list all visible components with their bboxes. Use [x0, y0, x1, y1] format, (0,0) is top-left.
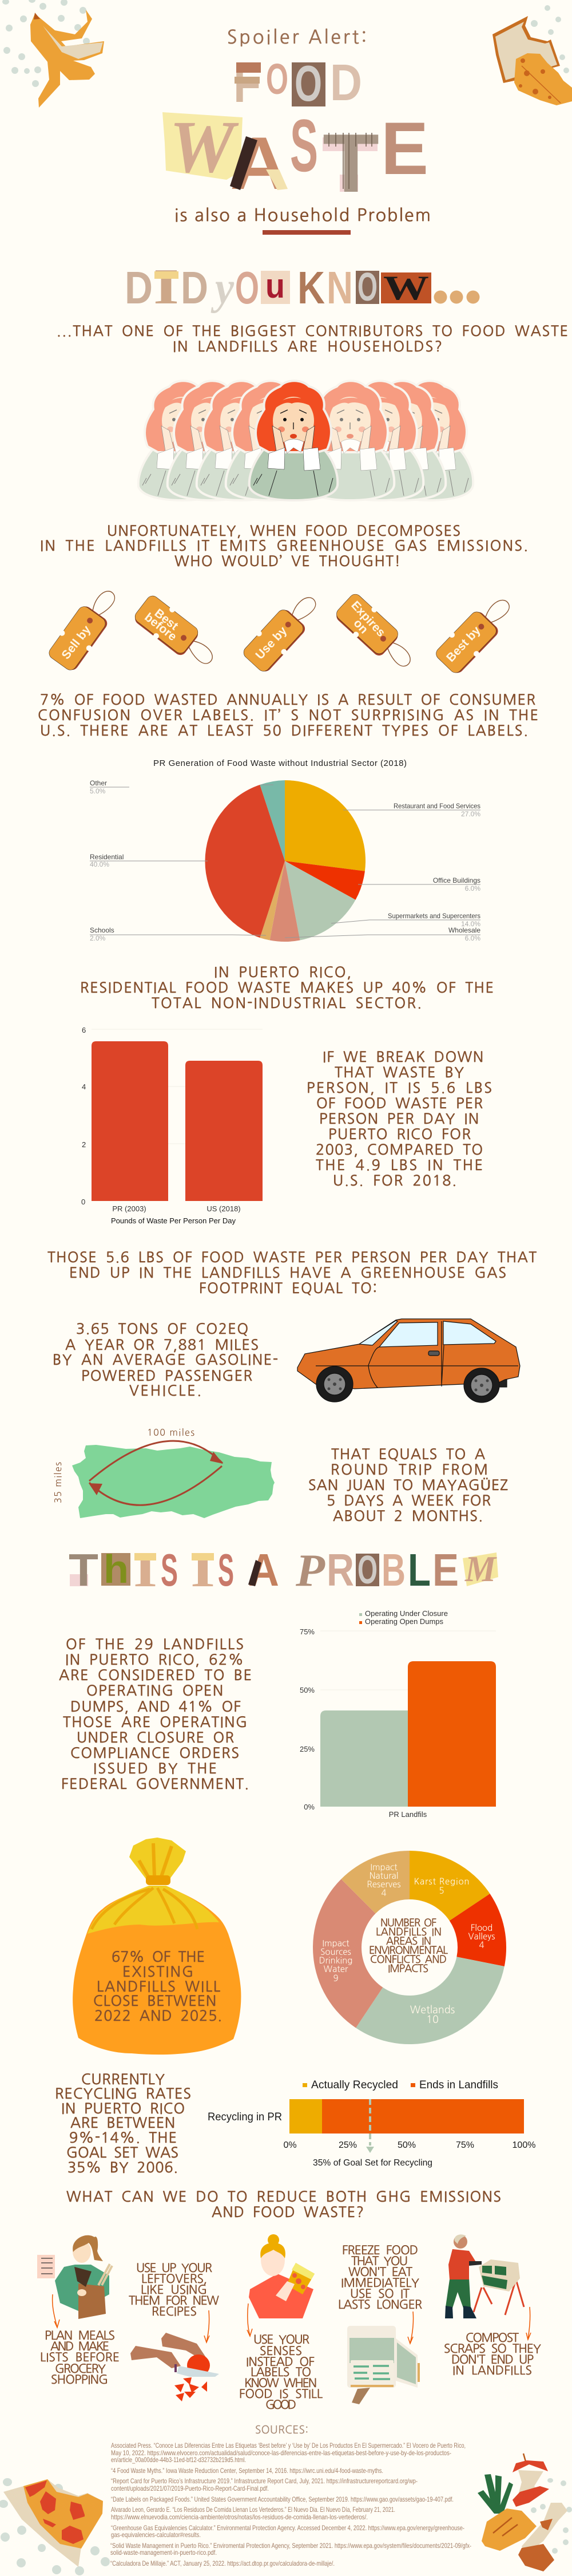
- decoration: bottom-left pizza and dots: [0, 2478, 110, 2575]
- heading: Did you know collage letters: [125, 259, 479, 315]
- icon: garbage bag with text: [73, 1838, 241, 2055]
- text: freeze food: WON'T EAT: [348, 2266, 413, 2278]
- heading: this is a problem collage letters: M: [464, 1548, 497, 1589]
- text: landfills open dumps: IN PUERTO RICO, 62%: [65, 1653, 244, 1667]
- heading: what can we do: [66, 2190, 501, 2219]
- text: source list: “Report Card for Puerto Rico’s Infrastructure 2019.” Infrastructure Report Card, July, 2021. https://infrastructurereportcard.org/wp-: [111, 2477, 418, 2485]
- text: freeze food: FREEZE FOOD: [342, 2245, 418, 2257]
- text: tons of CO2: 3.65 TONS OF CO2EQ: [76, 1322, 248, 1336]
- icon: garbage bag with text: CLOSE BETWEEN: [93, 1994, 216, 2008]
- icon: food date tags: before: [142, 611, 179, 643]
- text: compost: COMPOST: [466, 2332, 519, 2344]
- bar chart: pounds of waste per person: 4: [82, 1082, 86, 1091]
- text: waste per person: [307, 1050, 492, 1188]
- pie chart: PR generation of food waste: 6.0%: [465, 884, 480, 892]
- text: landfills open dumps: OPERATING OPEN: [86, 1684, 223, 1698]
- title: FOOD collage letters: O: [266, 55, 288, 103]
- text: source list: content/uploads/2021/07/2019-Puerto-Rico-Report-Card-Final.pdf.: [111, 2484, 269, 2492]
- subtitle: is also a Household Problem: [174, 207, 431, 224]
- title: FOOD collage letters: F: [233, 53, 261, 114]
- donut chart: landfills in conflict areas: Sources: [320, 1948, 351, 1957]
- heading: Did you know collage letters: K: [297, 262, 325, 313]
- donut chart: landfills in conflict areas: 4: [479, 1941, 484, 1950]
- bar chart: PR landfills: 50%: [300, 1686, 315, 1694]
- donut chart: landfills in conflict areas: 10: [426, 2014, 439, 2025]
- text: tons of CO2: BY AN AVERAGE GASOLINE-: [53, 1353, 278, 1367]
- bar chart: PR landfills: Operating Under Closure: [365, 1609, 448, 1618]
- bar chart: recycling in PR: 35% of Goal Set for Recycling: [313, 2158, 432, 2168]
- donut chart: landfills in conflict areas: Impact: [370, 1863, 398, 1872]
- pie chart: PR generation of food waste: 40.0%: [90, 860, 109, 868]
- text: landfills open dumps: ARE CONSIDERED TO BE: [59, 1668, 252, 1682]
- icon: food date tags: on: [351, 617, 371, 637]
- arrow: compost: [526, 2307, 531, 2340]
- text: waste per person: THAT WASTE BY: [335, 1065, 464, 1080]
- text: landfills open dumps: COMPLIANCE ORDERS: [70, 1746, 239, 1760]
- bar chart: pounds of waste per person: 2: [82, 1140, 86, 1149]
- text: consumer confusion over labels: U.S. THERE ARE AT LEAST 50 DIFFERENT TYPES OF LABELS.: [40, 724, 528, 738]
- text: greenhouse gas footprint: THOSE 5.6 LBS OF FOOD WASTE PER PERSON PER DAY THAT: [47, 1250, 537, 1265]
- heading: Did you know collage letters: y: [210, 263, 234, 314]
- pie chart: PR generation of food waste: 27.0%: [461, 810, 480, 818]
- heading: sources: SOURCES:: [255, 2424, 308, 2435]
- text: source list: Associated Press. “Conoce Las Diferencias Entre Las Etiquetas ‘Best before’ y ‘Use by’ De Los Productos En El Supermercado.” El Vocero de Puerto Rico,: [111, 2441, 466, 2449]
- pie chart: PR generation of food waste: 5.0%: [90, 787, 106, 795]
- text: compost: [444, 2332, 541, 2377]
- heading: this is a problem collage letters: [69, 1542, 498, 1598]
- text: unfortunately: UNFORTUNATELY, WHEN FOOD DECOMPOSES: [107, 524, 460, 538]
- text: source list: “Greenhouse Gas Equivalencies Calculator.” Environmental Protection Agency. Accessed December 4, 2022. https://www.epa.gov/energy/greenhouse-: [111, 2524, 464, 2532]
- text: source list: “4 Food Waste Myths.” Iowa Waste Reduction Center, September 14, 2016. https://iwrc.uni.edu/4-food-waste-myths.: [111, 2467, 383, 2475]
- bar chart: recycling in PR: Actually Recycled: [311, 2079, 398, 2091]
- heading: this is a problem collage letters: S: [161, 1544, 178, 1595]
- text: plan meals: PLAN MEALS: [45, 2330, 115, 2342]
- pie chart: PR generation of food waste: Office Buildings: [433, 876, 480, 884]
- text: round trip: ABOUT 2 MONTHS.: [333, 1509, 483, 1523]
- heading: Did you know collage letters: N: [327, 262, 353, 313]
- tip: use your senses: [249, 2234, 315, 2318]
- text: use your senses: LABELS TO: [251, 2366, 311, 2379]
- bar chart: recycling in PR: 50%: [398, 2140, 416, 2150]
- bar chart: pounds of waste per person: US (2018): [206, 1204, 241, 1213]
- tip: plan meals: [37, 2235, 112, 2319]
- arrow: freeze food: [408, 2312, 414, 2344]
- pie chart: PR generation of food waste: 14.0%: [461, 920, 480, 928]
- bar chart: PR landfills: 75%: [300, 1627, 315, 1636]
- bar chart: recycling in PR: Recycling in PR: [208, 2111, 282, 2123]
- text: tons of CO2: [53, 1322, 278, 1398]
- text: greenhouse gas footprint: END UP IN THE LANDFILLS HAVE A GREENHOUSE GAS: [69, 1266, 506, 1280]
- text: consumer confusion over labels: [38, 693, 538, 738]
- text: freeze food: USE SO IT: [350, 2288, 410, 2300]
- pie chart: PR generation of food waste: 6.0%: [465, 934, 480, 942]
- text: freeze food: LASTS LONGER: [338, 2299, 422, 2311]
- text: landfills open dumps: [59, 1637, 252, 1791]
- bar chart: recycling in PR: 100%: [513, 2140, 535, 2150]
- text: compost: DON'T END UP: [451, 2354, 534, 2366]
- icon: food date tags: Use by: [253, 624, 289, 662]
- text: waste per person: THE 4.9 LBS IN THE: [316, 1158, 483, 1172]
- icon: food date tags: [45, 581, 519, 677]
- heading: Did you know collage letters: O: [357, 264, 378, 309]
- bar chart: recycling in PR: 75%: [456, 2140, 474, 2150]
- text: leftovers: USE UP YOUR: [136, 2262, 212, 2274]
- title: FOOD collage letters: D: [330, 54, 362, 112]
- text: waste per person: PUERTO RICO FOR: [328, 1127, 471, 1141]
- map: Puerto Rico with round-trip arrows: [54, 1428, 275, 1518]
- donut chart: landfills in conflict areas: Drinking: [319, 1957, 352, 1965]
- text: plan meals: GROCERY: [55, 2363, 106, 2375]
- heading: this is a problem collage letters: L: [408, 1544, 431, 1595]
- text: landfills open dumps: FEDERAL GOVERNMENT.: [61, 1777, 249, 1791]
- donut chart: landfills in conflict areas: IMPACTS: [388, 1963, 428, 1974]
- text: waste per person: U.S. FOR 2018.: [333, 1174, 456, 1188]
- text: waste per person: PERSON PER DAY IN: [319, 1112, 479, 1126]
- text: landfills open dumps: THOSE ARE OPERATING: [63, 1715, 247, 1729]
- text: compost: SCRAPS SO THEY: [444, 2343, 541, 2355]
- heading: this is a problem collage letters: T: [69, 1544, 98, 1595]
- text: waste per person: OF FOOD WASTE PER: [316, 1096, 483, 1111]
- title: FOOD collage letters: [233, 53, 362, 114]
- donut chart: landfills in conflict areas: Natural: [370, 1872, 398, 1880]
- title: WASTE collage letters: E: [381, 106, 428, 190]
- heading: Did you know collage letters: O: [235, 262, 259, 313]
- bar chart: PR landfills: Operating Open Dumps: [365, 1617, 443, 1626]
- text: biggest contributors: [57, 324, 568, 354]
- text: source list: Alvarado Leon, Gerardo E. “Los Residuos De Comida Llenan Los Vertederos.” El Nuevo Dia. El Nuevo Día, February 21, 2021.: [111, 2506, 395, 2514]
- text: source list: gas-equivalencies-calculator#results.: [111, 2531, 201, 2539]
- text: compost: IN LANDFILLS: [452, 2365, 532, 2377]
- map: Puerto Rico with round-trip arrows: 100 miles: [147, 1428, 194, 1437]
- donut chart: landfills in conflict areas: CONFLICTS AND: [370, 1954, 447, 1965]
- decoration: top-left banana peel and dots: [2, 0, 104, 108]
- donut chart: landfills in conflict areas: AREAS IN: [386, 1936, 431, 1946]
- text: recycling rates: IN PUERTO RICO: [61, 2101, 185, 2116]
- text: waste per person: PERSON, IT IS 5.6 LBS: [307, 1081, 492, 1095]
- text: use your senses: KNOW WHEN: [244, 2377, 317, 2389]
- bar chart: PR landfills: [300, 1609, 496, 1819]
- heading: Did you know collage letters: D: [181, 262, 208, 313]
- title: WASTE collage letters: [162, 104, 428, 210]
- text: residential share: [80, 965, 494, 1010]
- text: residential share: IN PUERTO RICO,: [214, 965, 351, 979]
- heading: this is a problem collage letters: E: [432, 1544, 459, 1595]
- heading: what can we do: WHAT CAN WE DO TO REDUCE BOTH GHG EMISSIONS: [66, 2190, 501, 2204]
- heading: Spoiler Alert: Spoiler Alert:: [227, 28, 367, 46]
- pie chart: PR generation of food waste: Restaurant and Food Services: [394, 802, 480, 810]
- text: waste per person: 2003, COMPARED TO: [316, 1143, 483, 1157]
- text: source list: “Solid Waste Management in Puerto Rico.” Enviromental Protection Agency, September 2021. https://www.epa.gov/system/files/documents/2021-09/gfx-: [110, 2542, 471, 2550]
- text: greenhouse gas footprint: [47, 1250, 537, 1295]
- text: residential share: RESIDENTIAL FOOD WASTE MAKES UP 40% OF THE: [80, 981, 494, 995]
- donut chart: landfills in conflict areas: Water: [324, 1965, 348, 1974]
- heading: this is a problem collage letters: I: [190, 1542, 215, 1598]
- bar chart: pounds of waste per person: 0: [81, 1198, 85, 1206]
- text: leftovers: LIKE USING: [141, 2284, 207, 2296]
- text: tons of CO2: A YEAR OR 7,881 MILES: [65, 1338, 259, 1352]
- heading: Did you know collage letters: W: [383, 269, 429, 307]
- bar chart: pounds of waste per person: 6: [82, 1026, 86, 1034]
- pie chart: PR generation of food waste: Wholesale: [448, 926, 480, 934]
- text: round trip: [308, 1447, 508, 1523]
- text: plan meals: SHOPPING: [51, 2374, 108, 2386]
- donut chart: landfills in conflict areas: Wetlands: [410, 2005, 455, 2015]
- donut chart: landfills in conflict areas: 9: [333, 1974, 339, 1983]
- icon: garbage bag with text: LANDFILLS WILL: [97, 1980, 220, 1994]
- text: use your senses: [239, 2334, 323, 2411]
- title: WASTE collage letters: W: [169, 106, 239, 188]
- pie chart: PR generation of food waste: Residential: [90, 853, 124, 861]
- tip: compost: [445, 2234, 524, 2318]
- text: unfortunately: IN THE LANDFILLS IT EMITS GREENHOUSE GAS EMISSIONS.: [40, 539, 528, 553]
- text: plan meals: AND MAKE: [50, 2341, 109, 2353]
- text: source list: May 10, 2022. https://www.elvocero.com/actualidad/salud/conoce-las-diferencias-entre-las-etiquetas-best-before-y-use-by-de-los-productos-: [111, 2449, 451, 2457]
- text: use your senses: INSTEAD OF: [246, 2356, 315, 2368]
- title: WASTE collage letters: T: [323, 117, 379, 210]
- bar chart: pounds of waste per person: [81, 1026, 263, 1225]
- text: recycling rates: GOAL SET WAS: [66, 2146, 178, 2160]
- text: freeze food: THAT YOU: [351, 2255, 408, 2267]
- heading: Did you know collage letters: u: [265, 267, 285, 305]
- icon: freezer: [347, 2326, 420, 2404]
- text: landfills open dumps: UNDER CLOSURE OR: [77, 1730, 234, 1745]
- text: greenhouse gas footprint: FOOTPRINT EQUAL TO:: [199, 1281, 377, 1295]
- text: consumer confusion over labels: 7% OF FOOD WASTED ANNUALLY IS A RESULT OF CONSUMER: [40, 693, 535, 707]
- donut chart: landfills in conflict areas: 4: [381, 1889, 387, 1898]
- donut chart: landfills in conflict areas: 5: [439, 1887, 444, 1895]
- text: unfortunately: [40, 524, 528, 568]
- bar chart: pounds of waste per person: Pounds of Waste Per Person Per Day: [111, 1216, 236, 1225]
- text: leftovers: [129, 2262, 219, 2318]
- bar chart: recycling in PR: Ends in Landfills: [419, 2079, 498, 2091]
- text: round trip: ROUND TRIP FROM: [331, 1463, 488, 1477]
- text: round trip: SAN JUAN TO MAYAGÜEZ: [308, 1477, 508, 1492]
- text: leftovers: LEFTOVERS,: [141, 2273, 207, 2285]
- icon: food date tags: Best by: [444, 624, 483, 665]
- text: recycling rates: ARE BETWEEN: [70, 2116, 175, 2130]
- text: tons of CO2: POWERED PASSENGER: [81, 1369, 252, 1383]
- heading: this is a problem collage letters: P: [295, 1546, 325, 1596]
- text: biggest contributors: IN LANDFILLS ARE HOUSEHOLDS?: [173, 339, 442, 354]
- heading: this is a problem collage letters: A: [248, 1544, 279, 1595]
- map: Puerto Rico with round-trip arrows: 35 miles: [54, 1462, 63, 1503]
- icon: garbage bag with text: EXISTING: [122, 1965, 193, 1979]
- text: recycling rates: 35% BY 2006.: [67, 2160, 178, 2175]
- text: freeze food: [338, 2245, 422, 2311]
- heading: this is a problem collage letters: I: [133, 1542, 157, 1598]
- donut chart: landfills in conflict areas: NUMBER OF: [380, 1918, 436, 1928]
- text: use your senses: GOOD: [265, 2399, 296, 2411]
- text: round trip: THAT EQUALS TO A: [331, 1447, 485, 1461]
- text: recycling rates: [55, 2072, 191, 2175]
- text: landfills open dumps: ISSUED BY THE: [93, 1761, 217, 1776]
- pie chart: PR generation of food waste: Other: [90, 779, 107, 787]
- text: leftovers: THEM FOR NEW: [129, 2295, 219, 2307]
- icon: garbage bag with text: 2022 AND 2025.: [94, 2009, 222, 2023]
- pie chart: PR generation of food waste: PR Generation of Food Waste without Industrial Sector (2018): [153, 758, 407, 768]
- bar chart: pounds of waste per person: PR (2003): [112, 1204, 146, 1213]
- heading: this is a problem collage letters: B: [382, 1544, 406, 1595]
- bar chart: PR landfills: 25%: [300, 1745, 315, 1753]
- text: recycling rates: CURRENTLY: [81, 2072, 165, 2087]
- text: recycling rates: RECYCLING RATES: [55, 2087, 191, 2101]
- donut chart: landfills in conflict areas: [313, 1851, 506, 2044]
- arrow: use your senses: [247, 2304, 252, 2336]
- decoration: bottom-right apple core, turnip and drumstick: [478, 2453, 572, 2571]
- text: use your senses: SENSES: [260, 2345, 302, 2357]
- heading: what can we do: AND FOOD WASTE?: [212, 2205, 364, 2219]
- text: source list: “Calculadora De Millaje.” ACT, January 25, 2022. https://act.dtop.pr.gov/calculadora-de-millaje/.: [110, 2559, 335, 2567]
- donut chart: landfills in conflict areas: ENVIRONMENTAL: [369, 1945, 448, 1955]
- text: round trip: 5 DAYS A WEEK FOR: [327, 1494, 491, 1508]
- illustration: worried women: [138, 381, 473, 500]
- heading: this is a problem collage letters: R: [327, 1544, 354, 1595]
- text: consumer confusion over labels: CONFUSION OVER LABELS. IT’ S NOT SURPRISING AS IN THE: [38, 708, 538, 722]
- donut chart: landfills in conflict areas: Flood: [471, 1924, 492, 1933]
- text: plan meals: LISTS BEFORE: [40, 2352, 120, 2364]
- heading: Did you know collage letters: I: [153, 259, 179, 315]
- icon: garbage bag with text: 67% OF THE: [112, 1950, 205, 1964]
- arrow: leftovers: [204, 2310, 209, 2342]
- text: use your senses: FOOD IS STILL: [239, 2388, 323, 2400]
- subtitle: [174, 207, 431, 235]
- heading: this is a problem collage letters: S: [218, 1544, 234, 1595]
- text: source list: “Date Labels on Packaged Foods.” United States Government Accountability Office, September 2019. https://www.gao.gov/assets/gao-19-407.pdf.: [111, 2495, 454, 2503]
- title: FOOD collage letters: O: [295, 55, 322, 112]
- bar chart: PR landfills: 0%: [304, 1803, 315, 1811]
- pie chart: PR generation of food waste: [90, 758, 480, 942]
- decoration: top-right bread and cheese: [492, 5, 572, 105]
- icon: orange car: [297, 1319, 520, 1402]
- text: freeze food: IMMEDIATELY: [341, 2277, 419, 2289]
- icon: food date tags: Best: [152, 606, 181, 633]
- icon: food date tags: Expires: [348, 599, 388, 639]
- pie chart: PR generation of food waste: Schools: [90, 926, 114, 934]
- donut chart: landfills in conflict areas: Impact: [322, 1939, 349, 1948]
- bar chart: PR landfills: PR Landfils: [389, 1810, 427, 1819]
- donut chart: landfills in conflict areas: Valleys: [468, 1933, 495, 1941]
- text: tons of CO2: VEHICLE.: [129, 1384, 201, 1398]
- text: use your senses: USE YOUR: [253, 2334, 309, 2346]
- text: biggest contributors: ...THAT ONE OF THE BIGGEST CONTRIBUTORS TO FOOD WASTE: [57, 324, 568, 338]
- text: source list: solid-waste-management-in-puerto-rico.pdf.: [110, 2549, 217, 2557]
- text: source list: https://www.elnuevodia.com/ciencia-ambiente/otros/notas/los-residuos-de-comida-llenan-los-vertederos/.: [111, 2513, 368, 2521]
- text: residential share: TOTAL NON-INDUSTRIAL SECTOR.: [152, 996, 422, 1010]
- text: leftovers: RECIPES: [152, 2306, 197, 2318]
- title: WASTE collage letters: A: [230, 121, 288, 205]
- text: landfills open dumps: OF THE 29 LANDFILLS: [66, 1637, 244, 1652]
- donut chart: landfills in conflict areas: Reserves: [367, 1880, 401, 1889]
- bar chart: recycling in PR: 25%: [339, 2140, 357, 2150]
- text: recycling rates: 9%-14%. THE: [69, 2131, 177, 2145]
- text: landfills open dumps: DUMPS, AND 41% OF: [70, 1700, 241, 1714]
- text: source list: [110, 2441, 471, 2567]
- heading: this is a problem collage letters: O: [357, 1547, 378, 1592]
- title: WASTE collage letters: S: [290, 104, 318, 187]
- arrow: plan meals: [53, 2294, 59, 2328]
- text: plan meals: [40, 2330, 120, 2386]
- heading: Did you know collage letters: D: [125, 262, 153, 313]
- heading: this is a problem collage letters: h: [104, 1547, 129, 1591]
- text: source list: en/article_00a00dde-44b3-11ed-bf12-d32732b219d5.html.: [111, 2456, 246, 2464]
- pie chart: PR generation of food waste: Supermarkets and Supercenters: [388, 912, 480, 920]
- text: unfortunately: WHO WOULD’ VE THOUGHT!: [174, 554, 400, 568]
- donut chart: landfills in conflict areas: Karst Region: [414, 1878, 469, 1886]
- icon: food date tags: Sell by: [59, 623, 93, 662]
- pie chart: PR generation of food waste: 2.0%: [90, 934, 106, 942]
- text: waste per person: IF WE BREAK DOWN: [323, 1050, 483, 1064]
- donut chart: landfills in conflict areas: LANDFILLS IN: [376, 1927, 442, 1937]
- icon: hands cutting tomato: [130, 2333, 219, 2401]
- bar chart: recycling in PR: 0%: [283, 2140, 297, 2150]
- bar chart: recycling in PR: [208, 2079, 535, 2168]
